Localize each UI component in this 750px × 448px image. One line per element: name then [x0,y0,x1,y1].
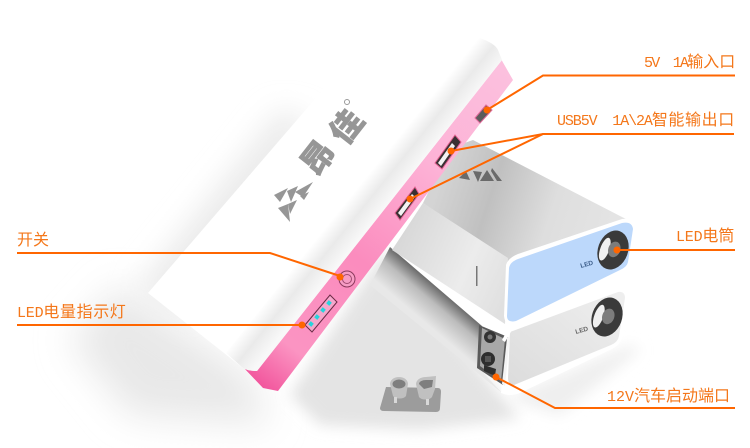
lower device side face [370,247,502,393]
round socket hole [392,380,406,388]
shaped socket hole [419,380,433,389]
callout: battery indicator [17,298,306,328]
callout: LED flashlight: LED电筒 [676,222,734,246]
callout: 12V starter port: 12V汽车启动端口 [607,382,730,406]
upper gray device [392,140,636,324]
upper device side face [392,203,508,324]
callout: 5V input [484,48,735,114]
pink side edge [243,59,513,391]
callout: USB output: USB5V 1A\2A智能输出口 [557,106,735,130]
callout: 5V input: 5V 1A输入口 [644,48,735,72]
accessory: clamp adapter [380,376,441,412]
battery LED indicator [305,295,337,332]
callout: power switch: 开关 [17,226,49,250]
adapter shaped socket [416,376,436,400]
callout: battery indicator: LED电量指示灯 [17,298,126,322]
micro USB input port [475,105,492,123]
upper device side slot [476,266,478,286]
adapter base plate [380,387,441,412]
bevel along long edge [226,37,502,371]
callout: LED flashlight [614,222,735,254]
white top face [148,12,502,371]
registered mark [344,100,350,104]
callout: 12V starter port [492,374,735,408]
lower device LED lens [586,293,628,341]
adapter pin right [426,399,429,405]
brand logo mark [274,182,313,222]
power button [339,271,355,287]
pink white power bank [148,12,513,391]
upper device top face [423,140,632,262]
car starter port panel [477,325,512,386]
adapter round socket [390,377,408,399]
adapter pin left [394,397,397,403]
USB port 1 [435,135,461,169]
blue front face [507,223,633,321]
LED mark: LED [580,260,594,270]
upper device logo [459,168,502,182]
lower device front face [508,292,625,385]
callout: USB output [406,106,735,202]
LED flashlight lens [592,226,634,274]
callout: power switch [17,226,344,280]
lower device front rim [501,289,628,395]
front rim [504,219,636,324]
lower gray device [370,247,628,395]
USB port 2 [395,187,419,220]
brand name: 昂 [288,130,344,184]
brand name second character: 佳 [317,99,373,153]
lower device LED label: LED [575,326,589,336]
